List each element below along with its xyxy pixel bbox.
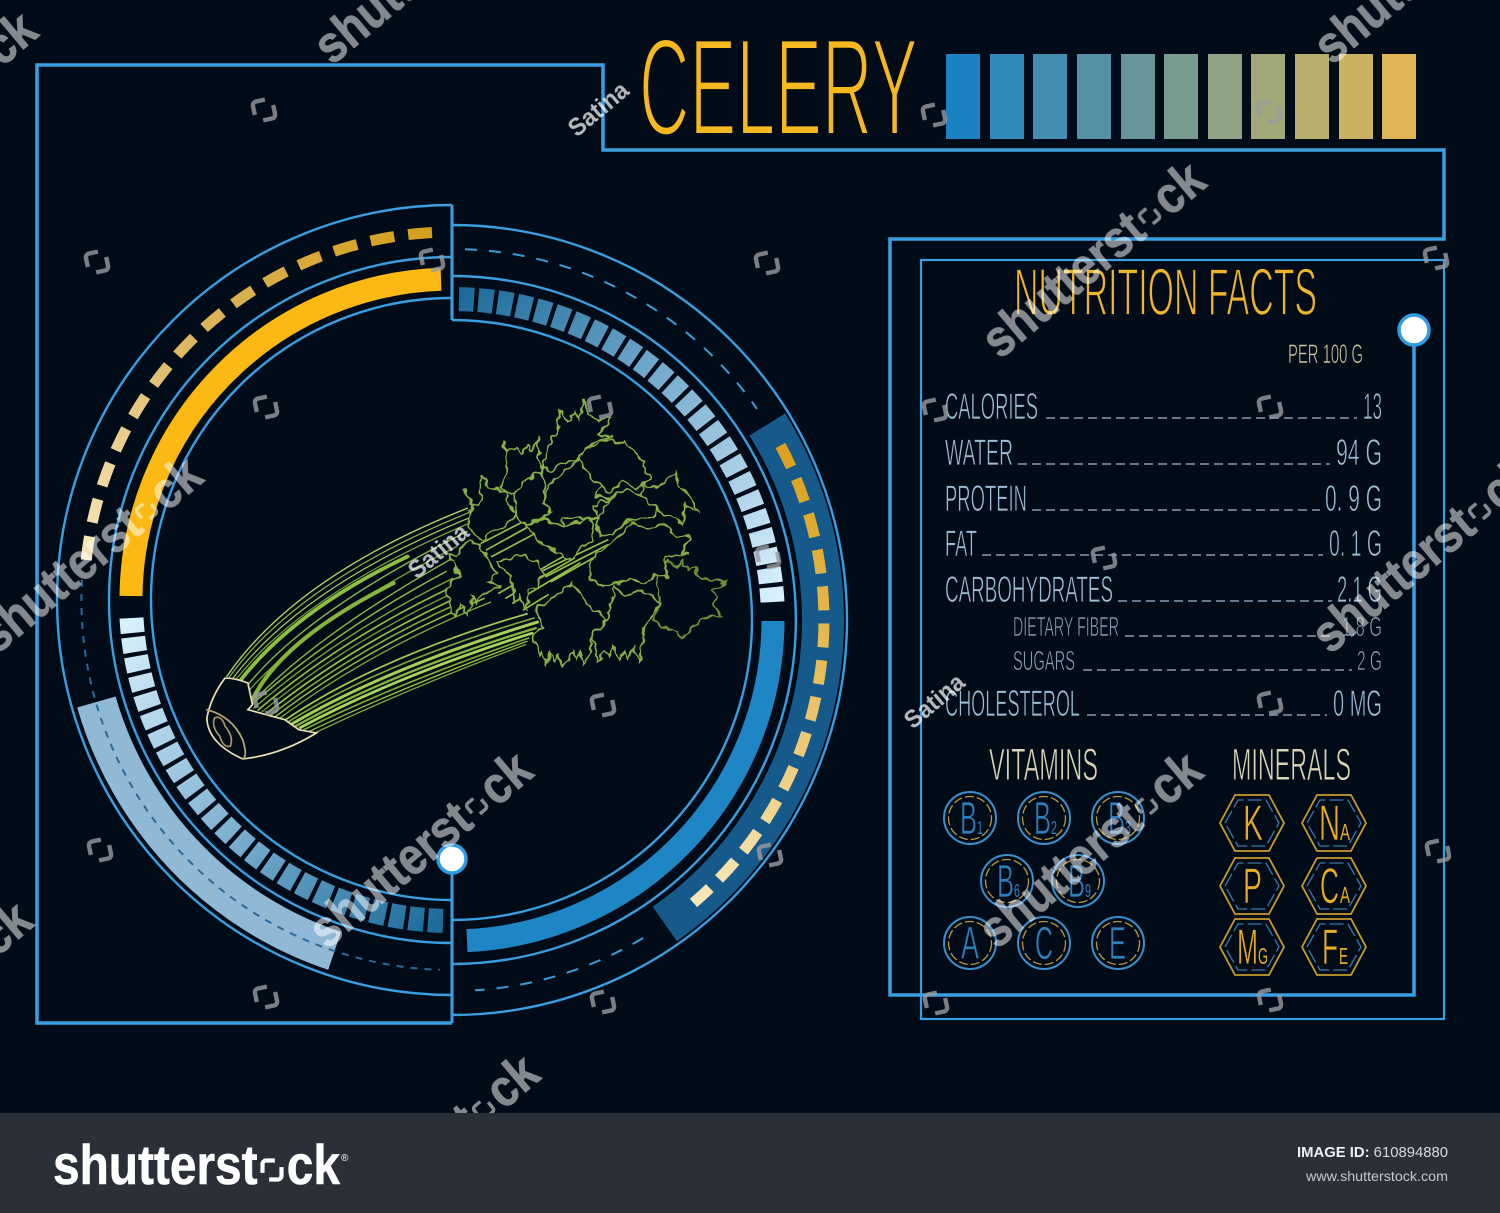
connector lines: [450, 205, 454, 1023]
row: fat: 0. 1 G: [1329, 523, 1382, 564]
badge: B1: B: [960, 792, 977, 844]
row: fat: FAT: [945, 523, 977, 564]
row: cholesterol: [945, 683, 1382, 724]
cut stalk base: [207, 678, 316, 759]
row: cholesterol: 0 MG: [1333, 683, 1382, 724]
image id: IMAGE ID: 610894880: [1297, 1144, 1448, 1161]
gold dashed arc: [86, 232, 432, 562]
ring outlines: [57, 205, 847, 1015]
nutrition table: [945, 386, 1382, 724]
badge: Mg: G: [1258, 943, 1268, 969]
text: 2.1 G: [1337, 569, 1382, 610]
badge: A: A: [961, 917, 979, 969]
leaves: [446, 398, 725, 666]
watermark: shutterstock marks: shutterstock: [967, 740, 1213, 959]
row: dietary fiber: [1013, 611, 1382, 642]
badge: E: E: [1109, 917, 1126, 969]
badge: C: C: [1035, 917, 1053, 969]
row: cholesterol: CHOLESTEROL: [945, 683, 1080, 724]
footer bar: [0, 1113, 1500, 1213]
badge: B3: [1092, 792, 1144, 844]
badge: E: [1092, 917, 1144, 969]
row: protein: 0. 9 G: [1325, 478, 1382, 519]
badge: Fe: [1302, 919, 1366, 975]
badge: B3: B: [1108, 792, 1125, 844]
badge: B1: [944, 792, 996, 844]
colour scale bars: [946, 54, 1416, 139]
badge: B1: 1: [977, 818, 983, 838]
light blue band segment: [96, 702, 335, 951]
right dashed guides: [465, 249, 757, 990]
vitamin badges: [944, 792, 1144, 969]
badge: C: [1018, 917, 1070, 969]
row: sugars: SUGARS: [1013, 645, 1075, 676]
badge: Ca: C: [1320, 858, 1339, 914]
panel: nutrition outline: [921, 260, 1444, 1019]
badge: Ca: [1302, 858, 1366, 914]
marker dot: nutrition panel: [1399, 315, 1429, 345]
badge: Na: A: [1340, 819, 1350, 845]
row: sugars: 2 G: [1357, 645, 1382, 676]
right square tick arc: [459, 299, 772, 602]
row: sugars: [1013, 645, 1382, 676]
badge: K: [1220, 795, 1284, 851]
row: water: [945, 432, 1382, 473]
frame connecting chart and title: [37, 65, 1444, 1023]
row: water: 94 G: [1336, 432, 1382, 473]
marker dot: chart: [438, 845, 466, 873]
row: dietary fiber: 1.8 G: [1342, 611, 1382, 642]
per 100 g label: PER 100 G: [1288, 339, 1363, 369]
badge: P: P: [1243, 858, 1262, 914]
badge: K: K: [1243, 795, 1263, 851]
row: dietary fiber: DIETARY FIBER: [1013, 611, 1119, 642]
badge: B9: 9: [1085, 881, 1091, 901]
badge: B2: B: [1034, 792, 1051, 844]
stalk fibres: [227, 508, 608, 733]
heading: minerals: MINERALS: [1232, 739, 1351, 790]
watermark: author credits: Satina: [899, 667, 971, 735]
footer logo: ®: [341, 1153, 349, 1164]
mineral badges: [1220, 795, 1366, 975]
heading: vitamins: VITAMINS: [989, 739, 1098, 790]
footer logo: shutterstock: [53, 1133, 341, 1196]
watermark: small bracket marks: [85, 98, 1450, 1015]
badge: B6: B: [997, 855, 1014, 907]
title: celery: CELERY: [639, 10, 918, 165]
badge: Fe: F: [1322, 919, 1338, 975]
badge: Na: [1302, 795, 1366, 851]
badge: B9: B: [1068, 855, 1085, 907]
badge: Ca: A: [1340, 882, 1350, 908]
website: www.shutterstock.com: [1305, 1168, 1448, 1184]
row: calories: CALORIES: [945, 386, 1038, 427]
badge: Mg: [1220, 919, 1284, 975]
badge: Na: N: [1319, 795, 1340, 851]
badge: B6: [981, 855, 1033, 907]
row: calories: [945, 386, 1382, 427]
row: protein: PROTEIN: [945, 478, 1027, 519]
row: protein: [945, 478, 1382, 519]
badge: B6: 6: [1014, 881, 1020, 901]
text: 13: [1363, 386, 1382, 427]
left square tick arc: [132, 618, 443, 921]
badge: B9: [1052, 855, 1104, 907]
badge: P: [1220, 858, 1284, 914]
left dashed guide: [81, 580, 440, 970]
badge: B2: 2: [1051, 818, 1057, 838]
gold dashes in dark band: [694, 446, 824, 903]
orange arc: [131, 279, 441, 596]
badge: Mg: M: [1237, 919, 1258, 975]
illustration: celery: [207, 398, 725, 759]
blue arc: [467, 621, 773, 941]
row: water: WATER: [945, 432, 1013, 473]
badge: A: [944, 917, 996, 969]
badge: B3: 3: [1125, 818, 1131, 838]
watermark: author credits: Satina: [403, 517, 475, 585]
row: carbohydrates: CARBOHYDRATES: [945, 569, 1113, 610]
badge: Fe: E: [1339, 943, 1348, 969]
watermark: shutterstock marks: shutterstock: [297, 740, 543, 959]
circular chart: [57, 205, 847, 1023]
dark blue band segment: [665, 424, 823, 924]
row: fat: [945, 523, 1382, 564]
watermark: author credits: [403, 75, 971, 735]
badge: B2: [1018, 792, 1070, 844]
watermark: shutterstock marks: shutterstock: [970, 150, 1216, 369]
watermark: author credits: Satina: [563, 75, 635, 143]
